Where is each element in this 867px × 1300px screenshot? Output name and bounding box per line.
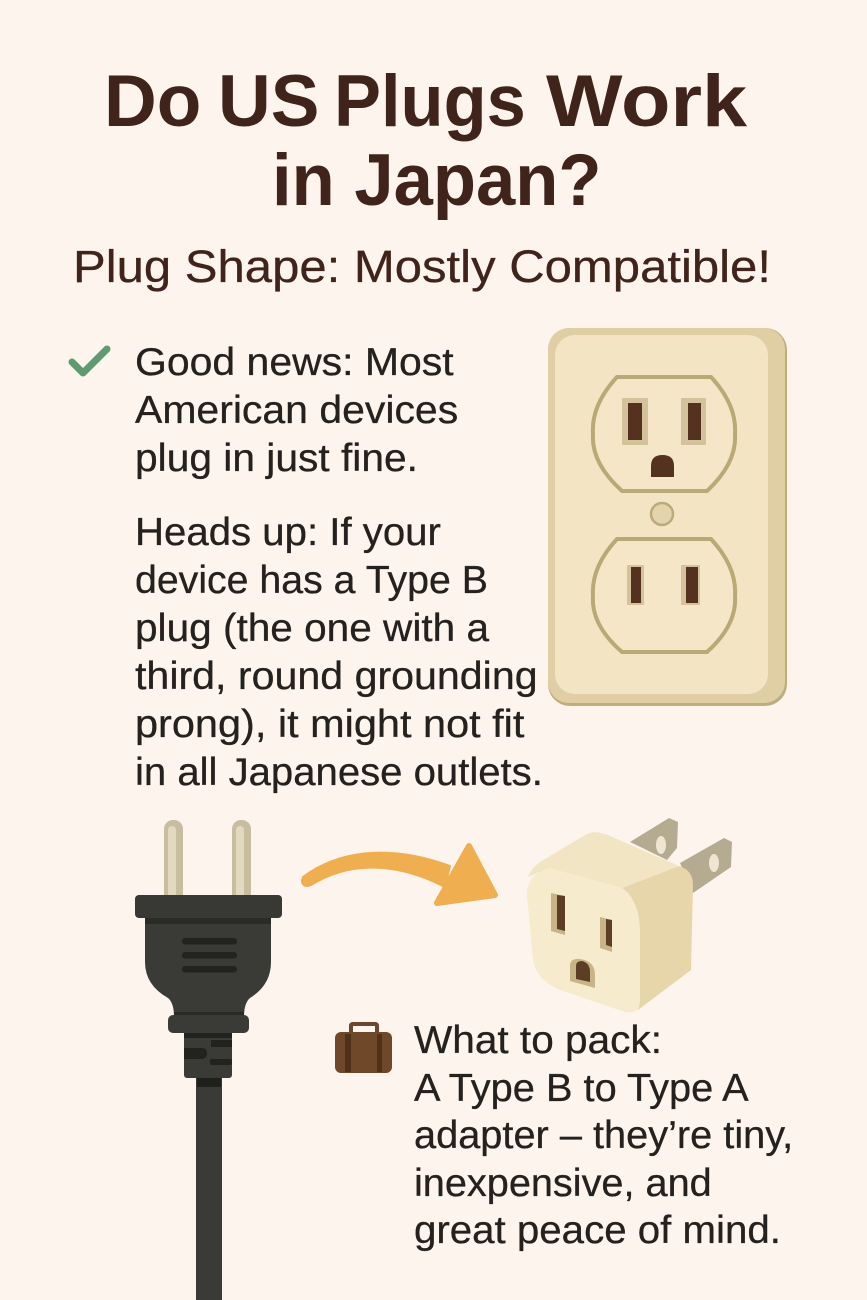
icon: wall outlet (548, 328, 787, 706)
what to pack text: What to pack: (414, 1019, 662, 1062)
title: in Japan? (272, 140, 601, 221)
title (104, 61, 748, 221)
subtitle: Plug Shape: Mostly Compatible! (73, 241, 771, 292)
heads up text: third, round grounding (135, 654, 538, 698)
icon: check mark (68, 346, 110, 376)
what to pack text: great peace of mind. (414, 1209, 781, 1252)
heads up text: plug (the one with a (135, 606, 489, 650)
title: US (218, 61, 319, 142)
heads up text (135, 510, 543, 794)
heads up text: Heads up: If your (135, 510, 441, 554)
icon: suitcase (335, 1022, 392, 1073)
icon: black US plug (135, 820, 282, 1300)
what to pack text (414, 1019, 793, 1252)
good news text (134, 340, 458, 480)
heads up text: device has a Type B (135, 558, 488, 602)
what to pack text: A Type B to Type A (414, 1066, 749, 1110)
title: Work (546, 61, 747, 142)
heads up text: in all Japanese outlets. (135, 750, 543, 794)
title: Plugs (334, 61, 526, 142)
good news text: Good news: Most (135, 340, 454, 384)
arrow (301, 843, 498, 906)
good news text: plug in just fine. (135, 436, 418, 480)
icon: adapter (527, 818, 732, 1012)
title: Do (104, 61, 201, 142)
what to pack text: inexpensive, and (414, 1162, 712, 1204)
good news text: American devices (135, 388, 458, 432)
what to pack text: adapter – they’re tiny, (414, 1114, 793, 1157)
heads up text: prong), it might not fit (135, 702, 524, 746)
